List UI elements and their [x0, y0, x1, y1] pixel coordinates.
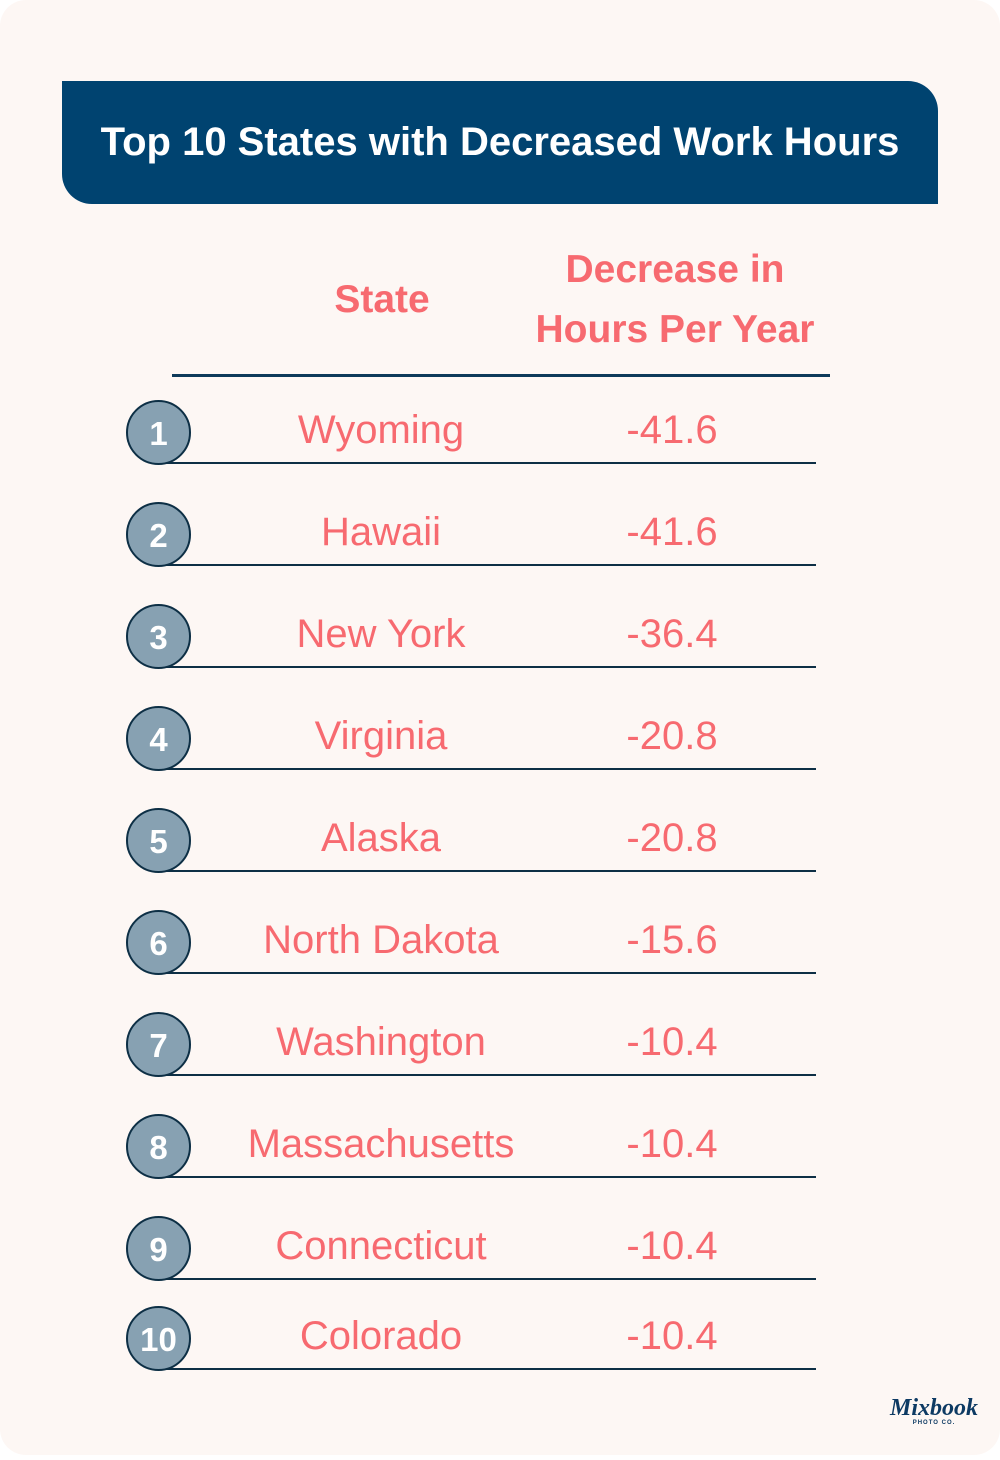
row 5 — [126, 808, 816, 873]
row 10 — [126, 1306, 816, 1371]
row 5: Alaska — [321, 816, 441, 860]
row 4: 4 — [149, 721, 168, 758]
row 1: 1 — [149, 415, 168, 452]
logo: PHOTO CO. — [913, 1420, 955, 1426]
row 7 — [126, 1012, 816, 1077]
row 3: -36.4 — [626, 612, 718, 656]
row 10: 10 — [140, 1321, 177, 1358]
row 9: Connecticut — [275, 1224, 487, 1268]
row 2: -41.6 — [626, 510, 718, 554]
title banner: Top 10 States with Decreased Work Hours — [101, 120, 899, 164]
row 3 — [126, 604, 816, 669]
title banner — [62, 81, 938, 204]
row 6: North Dakota — [263, 918, 499, 962]
row 8: 8 — [149, 1129, 168, 1166]
row 5: 5 — [149, 823, 168, 860]
row 7: 7 — [149, 1027, 168, 1064]
row 8: Massachusetts — [248, 1122, 514, 1166]
row 10: -10.4 — [626, 1314, 718, 1358]
row 1: Wyoming — [298, 408, 464, 452]
row 2 — [126, 502, 816, 567]
row 3: 3 — [149, 619, 168, 656]
header: state: State — [334, 278, 430, 321]
logo: Mixbook — [890, 1395, 978, 1421]
row 3: New York — [296, 612, 465, 656]
row 7: Washington — [276, 1020, 486, 1064]
row 8: -10.4 — [626, 1122, 718, 1166]
row 6 — [126, 910, 816, 975]
row 7: -10.4 — [626, 1020, 718, 1064]
row 9 — [126, 1216, 816, 1281]
header: decrease: Hours Per Year — [536, 308, 814, 351]
row 9: 9 — [149, 1231, 168, 1268]
row 6: 6 — [149, 925, 168, 962]
row 2: Hawaii — [321, 510, 441, 554]
row 8 — [126, 1114, 816, 1179]
header: decrease: Decrease in — [566, 248, 784, 291]
row 1: -41.6 — [626, 408, 718, 452]
row 9: -10.4 — [626, 1224, 718, 1268]
row 4: -20.8 — [626, 714, 718, 758]
header: decrease — [536, 248, 814, 351]
row 4: Virginia — [315, 714, 447, 758]
row 10: Colorado — [300, 1314, 462, 1358]
row 5: -20.8 — [626, 816, 718, 860]
row 1 — [126, 400, 816, 465]
row 2: 2 — [149, 517, 168, 554]
row 6: -15.6 — [626, 918, 718, 962]
row 4 — [126, 706, 816, 771]
